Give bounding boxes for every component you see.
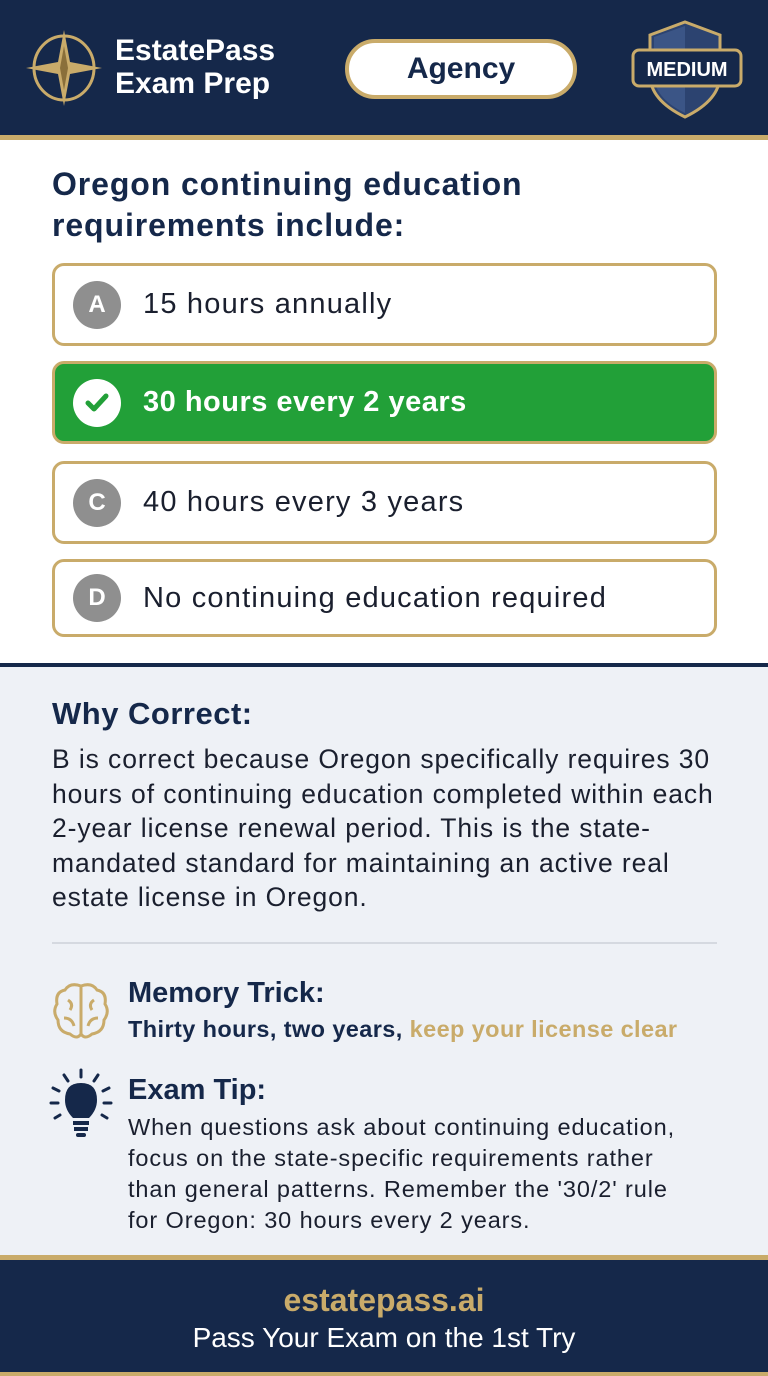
exam tip text: for Oregon: 30 hours every 2 years. xyxy=(128,1207,530,1233)
icon: brain xyxy=(53,983,109,1038)
exam tip heading: Exam Tip: xyxy=(128,1074,266,1106)
footer tagline: Pass Your Exam on the 1st Try xyxy=(193,1322,575,1353)
option A: 15 hours annually xyxy=(143,288,392,320)
option D xyxy=(52,559,717,637)
question text: requirements include: xyxy=(52,207,405,243)
exam tip text: than general patterns. Remember the '30/2' rule xyxy=(128,1176,668,1202)
icon: lightbulb xyxy=(50,1068,112,1137)
question text: Oregon continuing education xyxy=(52,166,523,202)
difficulty badge xyxy=(632,20,742,119)
option B correct: 30 hours every 2 years xyxy=(143,386,467,418)
footer xyxy=(0,1255,768,1376)
exam tip text xyxy=(128,1114,675,1233)
category pill: Agency xyxy=(407,52,515,85)
memory trick heading: Memory Trick: xyxy=(128,977,325,1009)
option D: D xyxy=(88,584,106,611)
icon: compass logo xyxy=(26,30,102,106)
option C: C xyxy=(88,488,106,516)
why correct heading: Why Correct: xyxy=(52,696,253,731)
option C: 40 hours every 3 years xyxy=(143,486,464,518)
brand name: EstatePass xyxy=(115,34,275,67)
explanation text: 2-year license renewal period. This is the state- xyxy=(52,813,651,843)
explanation text: mandated standard for maintaining an active real xyxy=(52,848,670,878)
brand name xyxy=(115,34,275,100)
explanation text: estate license in Oregon. xyxy=(52,882,368,912)
question text xyxy=(52,166,523,243)
footer url: estatepass.ai xyxy=(283,1282,484,1318)
exam tip text: focus on the state-specific requirements rather xyxy=(128,1145,654,1171)
explanation text: B is correct because Oregon specifically requires 30 xyxy=(52,744,710,774)
option D: No continuing education required xyxy=(143,582,607,614)
option C xyxy=(52,461,717,544)
option A: A xyxy=(88,290,106,318)
memory trick text: Thirty hours, two years, keep your license clear xyxy=(128,1016,677,1042)
category pill xyxy=(345,39,577,99)
brand name: Exam Prep xyxy=(115,67,270,100)
header xyxy=(0,0,768,140)
explanation text xyxy=(52,744,714,912)
question panel xyxy=(0,140,768,667)
option B correct xyxy=(52,361,717,444)
explanation text: hours of continuing education completed within each xyxy=(52,778,714,808)
exam tip text: When questions ask about continuing education, xyxy=(128,1114,675,1140)
difficulty badge: MEDIUM xyxy=(646,59,728,81)
option A xyxy=(52,263,717,346)
